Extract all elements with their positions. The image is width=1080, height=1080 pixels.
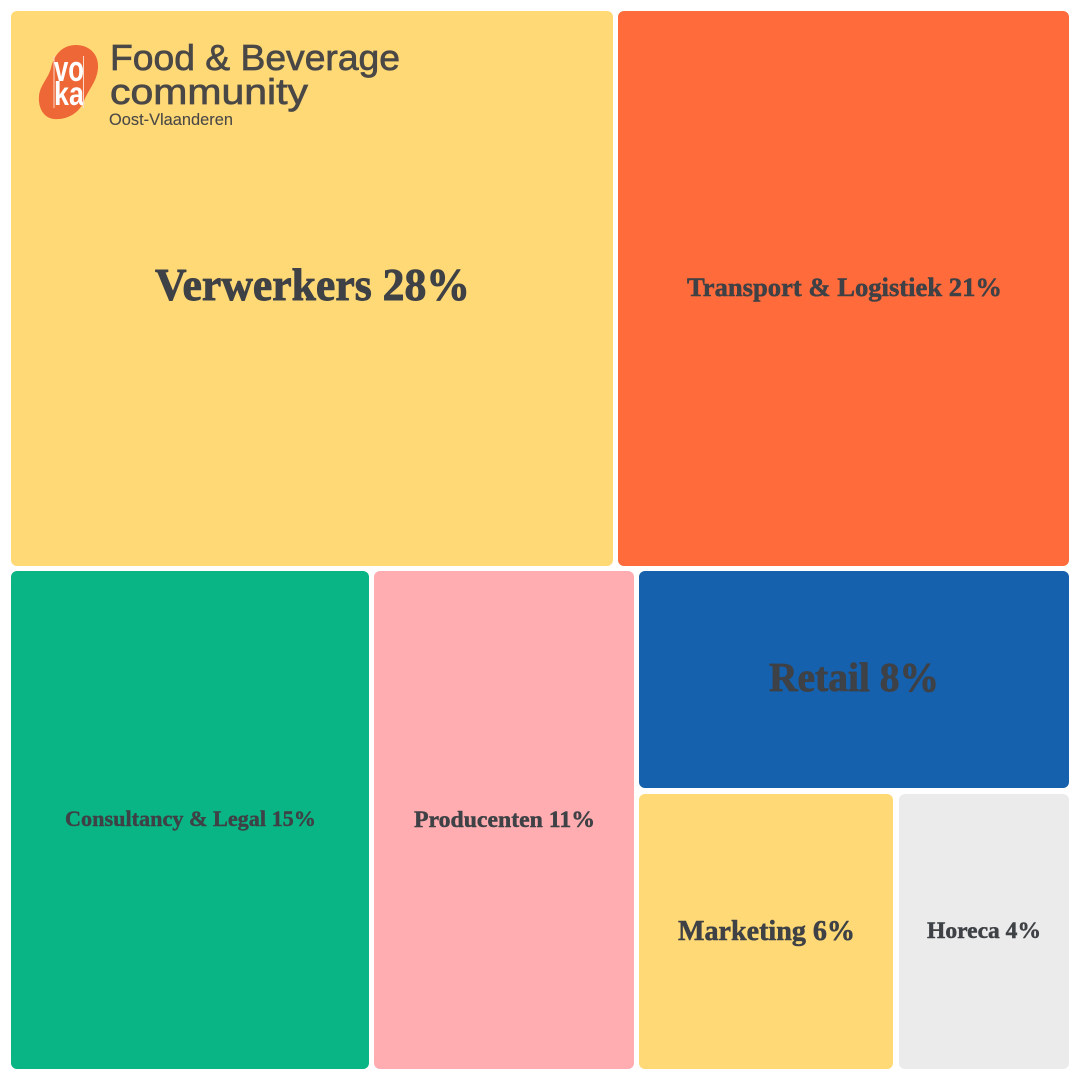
logo title line 2: community: [110, 71, 308, 112]
icon: voka blob: ka: [54, 75, 85, 112]
logo: Food & Beverage community: [39, 37, 400, 129]
label: Retail 8%: Retail 8%: [769, 654, 939, 700]
logo title line 1: Food & Beverage: [110, 37, 400, 78]
panel: Marketing: [639, 794, 893, 1069]
panel: Horeca: [899, 794, 1069, 1069]
label: Producenten 11%: Producenten 11%: [414, 807, 595, 832]
label: Transport & Logistiek 21%: Transport & Logistiek 21%: [687, 273, 1002, 302]
panel: Retail: [639, 571, 1069, 788]
panel: Producenten: [374, 571, 634, 1069]
panel: Transport & Logistiek: [618, 11, 1069, 566]
label: Horeca 4%: Horeca 4%: [927, 918, 1041, 943]
label: Verwerkers 28%: Verwerkers 28%: [155, 260, 470, 310]
panel: Verwerkers: [11, 11, 613, 566]
label: Consultancy & Legal 15%: Consultancy & Legal 15%: [65, 806, 316, 831]
icon: voka blob: vo: [54, 48, 84, 89]
logo subtitle: Oost-Vlaanderen: [109, 110, 233, 129]
panel: Consultancy & Legal: [11, 571, 369, 1069]
label: Marketing 6%: Marketing 6%: [678, 916, 855, 947]
icon: voka blob: [39, 45, 98, 119]
